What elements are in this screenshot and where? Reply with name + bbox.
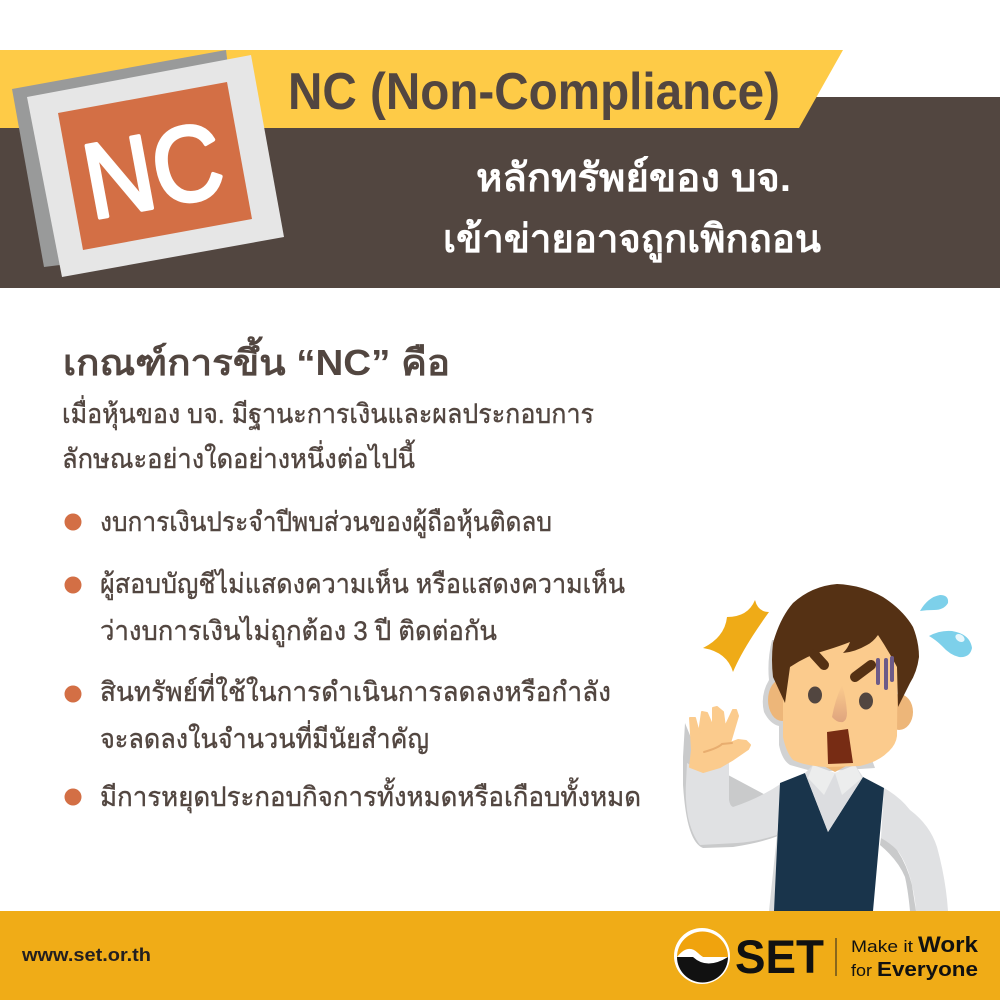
intro text: ลักษณะอย่างใดอย่างหนึ่งต่อไปนี้ <box>62 439 415 474</box>
bullet 2 <box>64 566 625 647</box>
bullet 3 <box>64 673 611 754</box>
nose <box>832 685 847 722</box>
bullet 3: สินทรัพย์ที่ใช้ในการดำเนินการลดลงหรือกำลัง <box>100 673 611 707</box>
icon: NC cards <box>12 50 284 277</box>
header dark band <box>0 97 1000 288</box>
header yellow ribbon <box>0 50 843 128</box>
subtitle: เข้าข่ายอาจถูกเพิกถอน <box>443 218 821 263</box>
logo: SET: Everyone <box>877 959 978 981</box>
vest side shade <box>769 835 781 911</box>
logo: SET: Make it <box>851 937 913 956</box>
right sleeve <box>881 788 948 911</box>
icon: NC cards: NC <box>75 100 232 242</box>
bullet 1: งบการเงินประจำปีพบส่วนของผู้ถือหุ้นติดลบ <box>100 507 552 539</box>
logo: SET <box>674 928 979 984</box>
neck <box>818 763 852 772</box>
eyebrows <box>814 654 871 677</box>
intro text: เมื่อหุ้นของ บจ. มีฐานะการเงินและผลประกอบการ <box>62 395 594 431</box>
subtitle: หลักทรัพย์ของ บจ. <box>476 155 791 200</box>
face <box>783 630 898 767</box>
intro text <box>62 395 594 474</box>
palm crease <box>704 743 732 752</box>
eyes <box>808 686 873 710</box>
left arm shadow <box>683 723 778 848</box>
title: NC (Non-Compliance) <box>288 63 780 121</box>
hand <box>690 707 750 772</box>
footer band <box>0 911 1000 1000</box>
hair <box>772 584 919 707</box>
bullet 3: จะลดลงในจำนวนที่มีนัยสำคัญ <box>100 720 429 754</box>
left sleeve <box>686 762 782 845</box>
website: www.set.or.th <box>21 944 151 965</box>
bullet 4: มีการหยุดประกอบกิจการทั้งหมดหรือเกือบทั้งหมด <box>100 777 641 814</box>
vest <box>774 773 884 911</box>
logo: SET: for <box>851 961 872 980</box>
logo: SET: Work <box>918 932 979 957</box>
shirt collar <box>805 765 863 832</box>
mouth <box>827 729 853 764</box>
bullet list <box>64 507 641 814</box>
right sleeve shade <box>880 838 916 911</box>
subtitle <box>443 155 821 263</box>
logo: SET: SET <box>735 930 824 983</box>
heading: เกณฑ์การขึ้น “NC” คือ <box>63 336 450 383</box>
head shadow <box>763 640 875 772</box>
ears <box>768 679 913 730</box>
worry lines <box>878 658 892 688</box>
bullet 2: ผู้สอบบัญชีไม่แสดงความเห็น หรือแสดงความเห็น <box>100 566 625 600</box>
icon: burst <box>703 600 769 672</box>
bullet 2: ว่างบการเงินไม่ถูกต้อง 3 ปี ติดต่อกัน <box>100 616 497 647</box>
illustration: surprised man <box>683 584 972 911</box>
icon: sweat drops <box>920 595 972 657</box>
